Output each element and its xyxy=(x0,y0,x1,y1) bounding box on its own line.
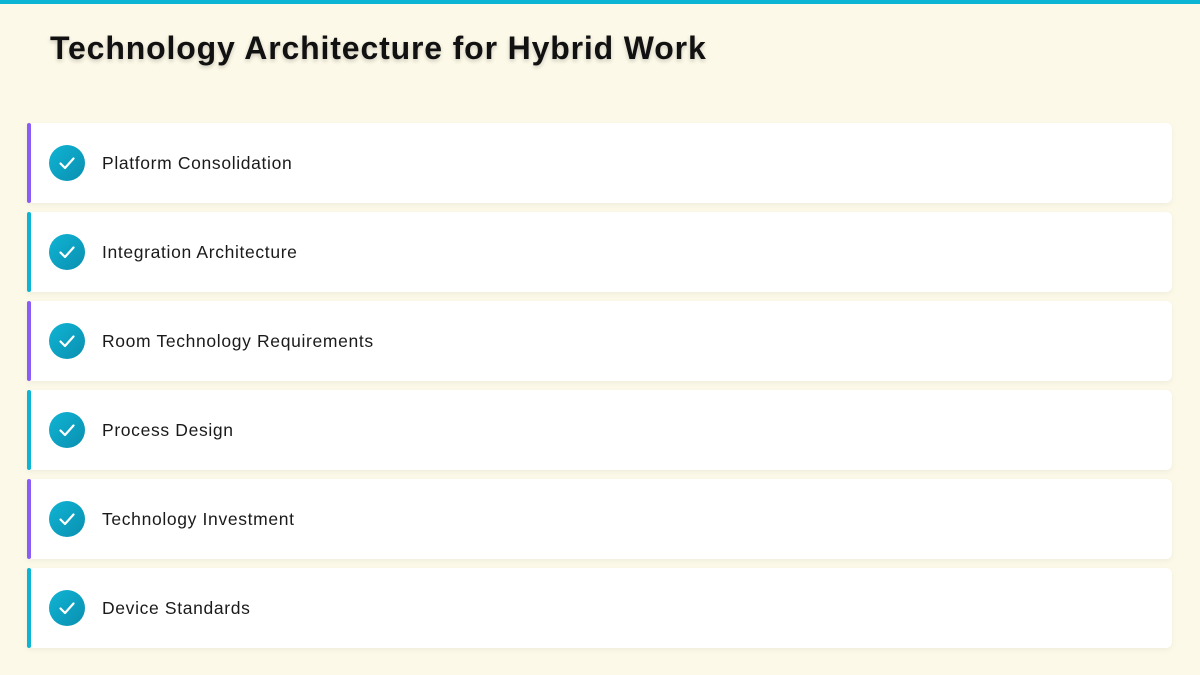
title: Technology Architecture for Hybrid Work xyxy=(50,30,707,66)
label: Technology Investment xyxy=(102,509,295,529)
icon: check xyxy=(49,412,85,448)
card: Room Technology Requirements xyxy=(27,301,1172,381)
label: Platform Consolidation xyxy=(102,153,292,173)
icon: check xyxy=(49,234,85,270)
card: Process Design xyxy=(27,390,1172,470)
icon: check xyxy=(49,501,85,537)
label: Integration Architecture xyxy=(102,242,298,262)
card: Technology Investment xyxy=(27,479,1172,559)
label: Process Design xyxy=(102,420,234,440)
icon: check xyxy=(49,145,85,181)
icon: check xyxy=(49,590,85,626)
label: Room Technology Requirements xyxy=(102,331,374,351)
label: Device Standards xyxy=(102,598,251,618)
card: Device Standards xyxy=(27,568,1172,648)
card: Integration Architecture xyxy=(27,212,1172,292)
card: Platform Consolidation xyxy=(27,123,1172,203)
icon: check xyxy=(49,323,85,359)
